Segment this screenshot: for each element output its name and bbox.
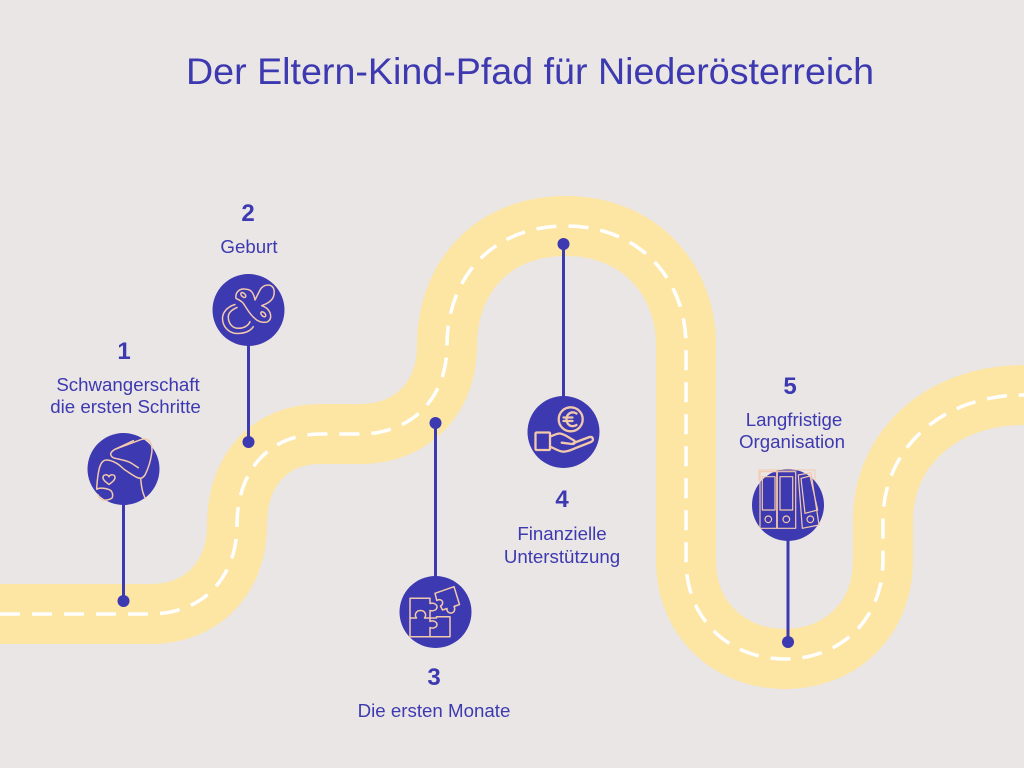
step 5: long-term organisation [739,373,845,648]
step 1 connector [122,500,125,601]
step 4 label: Unterstützung [504,546,620,567]
step 4 number: 4 [555,486,569,513]
step 1: pregnancy [50,338,201,607]
step 1 label: die ersten Schritte [50,396,201,417]
step 5 pin [782,636,794,648]
step 1 label: Schwangerschaft [56,374,200,395]
step 1 disc [88,433,160,505]
step 5 connector [786,530,790,642]
icon: binders [759,470,819,528]
step 3 pin [430,417,442,429]
step 4 connector [562,244,565,400]
step 5 label: Organisation [739,431,845,452]
step 2: birth [212,200,284,448]
icon: puzzle [410,587,460,637]
winding road path [0,226,1024,659]
step 1 pin [118,595,130,607]
step 4: financial support [504,238,620,567]
step 3 connector [434,423,437,580]
title: Der Eltern-Kind-Pfad für Niederösterreich [186,51,874,92]
icon: pregnant woman [97,439,152,500]
icon: hand with euro coin [536,407,593,452]
step 2 label: Geburt [220,236,278,257]
step 1 number: 1 [117,338,131,365]
step 5 label: Langfristige [746,409,842,430]
step 2 pin [242,436,254,448]
step 5 disc [752,469,824,541]
step 4 disc [528,396,600,468]
step 2 number: 2 [241,200,255,227]
step 5 number: 5 [783,373,797,400]
icon: pacifier [222,285,274,334]
step 3: first months [358,417,510,721]
step 3 label: Die ersten Monate [358,700,510,721]
step 2 disc [212,274,284,346]
step 2 connector [247,340,250,442]
step 3 disc [400,576,472,648]
step 4 label: Finanzielle [517,523,607,544]
step 4 pin [558,238,570,250]
step 3 number: 3 [427,664,441,691]
